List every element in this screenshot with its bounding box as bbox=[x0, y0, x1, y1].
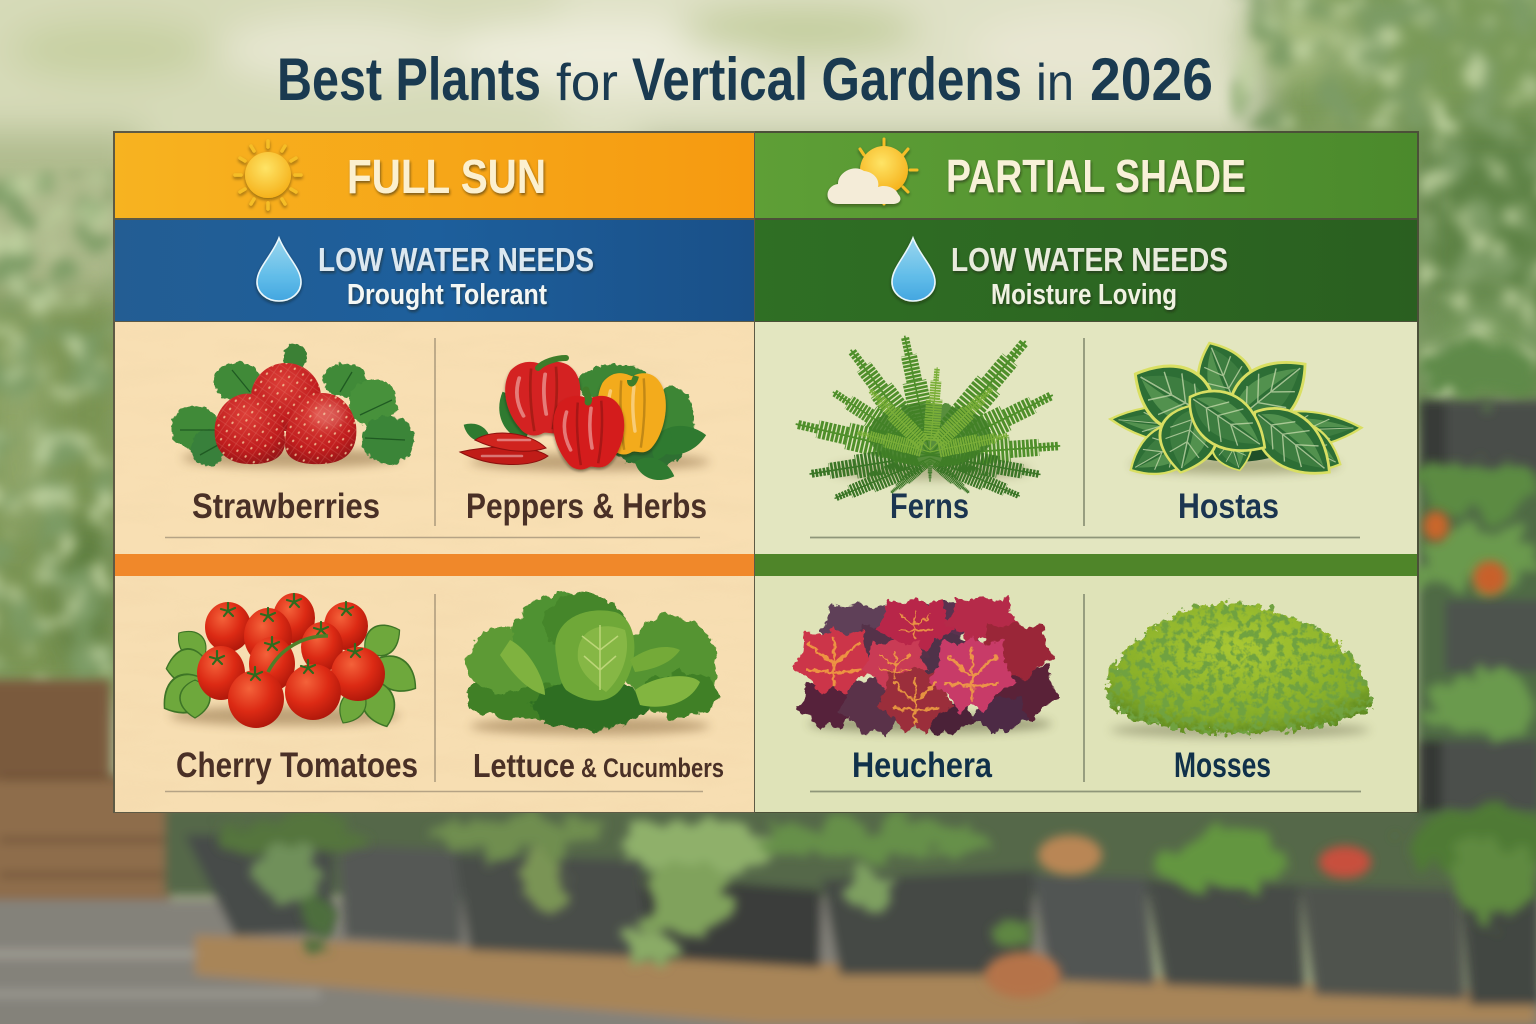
icon: sun behind cloud bbox=[828, 139, 917, 204]
heading: full sun: FULL SUN bbox=[347, 151, 546, 204]
label: strawberries: Strawberries bbox=[192, 487, 380, 526]
icon: sun bbox=[235, 141, 301, 209]
panel: full sun column bbox=[113, 131, 755, 813]
title: in bbox=[1036, 54, 1074, 112]
label: peppers and herbs: Peppers & Herbs bbox=[466, 487, 707, 526]
header band: full sun bbox=[115, 133, 754, 218]
plant: peppers and herbs bbox=[460, 358, 710, 486]
plant: mosses bbox=[1107, 602, 1371, 738]
heading: partial shade: PARTIAL SHADE bbox=[946, 150, 1246, 202]
plant: ferns bbox=[796, 336, 1060, 499]
foliage clumps bbox=[220, 344, 1536, 965]
water needs subheading: Moisture Loving bbox=[991, 279, 1177, 311]
header band: partial shade bbox=[755, 133, 1417, 218]
label: lettuce and cucumbers: Lettuce bbox=[473, 747, 575, 784]
water band: moisture loving bbox=[755, 220, 1417, 321]
plant area: lower cream card bbox=[115, 576, 754, 812]
plant area: upper cream card bbox=[115, 322, 754, 554]
divider stripe bbox=[115, 554, 754, 576]
plant: cherry tomatoes bbox=[154, 593, 425, 732]
water needs heading: LOW WATER NEEDS bbox=[318, 241, 594, 278]
label: mosses: Mosses bbox=[1174, 746, 1271, 785]
water band: drought tolerant bbox=[115, 220, 754, 321]
plant: strawberries bbox=[171, 344, 414, 468]
plant area: lower green card bbox=[755, 576, 1417, 812]
title: 2026 bbox=[1090, 46, 1213, 113]
panel: partial shade column bbox=[755, 131, 1419, 813]
foliage mottling bbox=[0, 0, 1536, 690]
divider stripe bbox=[755, 554, 1417, 576]
plant area: upper green card bbox=[755, 322, 1417, 554]
plant: lettuce and cucumbers bbox=[467, 594, 718, 735]
water needs subheading: Drought Tolerant bbox=[347, 279, 547, 311]
plant: heuchera bbox=[792, 596, 1060, 736]
title: Vertical Gardens bbox=[632, 46, 1022, 113]
label: heuchera: Heuchera bbox=[852, 746, 992, 785]
icon: water drop bbox=[257, 238, 301, 301]
title: Best Plants bbox=[277, 46, 541, 113]
plant: hostas bbox=[1109, 332, 1362, 492]
label: hostas: Hostas bbox=[1178, 487, 1279, 526]
label: cherry tomatoes: Cherry Tomatoes bbox=[176, 746, 418, 785]
label: lettuce and cucumbers bbox=[473, 747, 724, 784]
water needs heading: LOW WATER NEEDS bbox=[951, 241, 1228, 278]
title: for bbox=[556, 54, 618, 112]
icon: water drop bbox=[892, 238, 935, 301]
title bbox=[277, 46, 1213, 113]
label: ferns: Ferns bbox=[890, 487, 969, 526]
label: lettuce and cucumbers: & Cucumbers bbox=[581, 753, 724, 783]
